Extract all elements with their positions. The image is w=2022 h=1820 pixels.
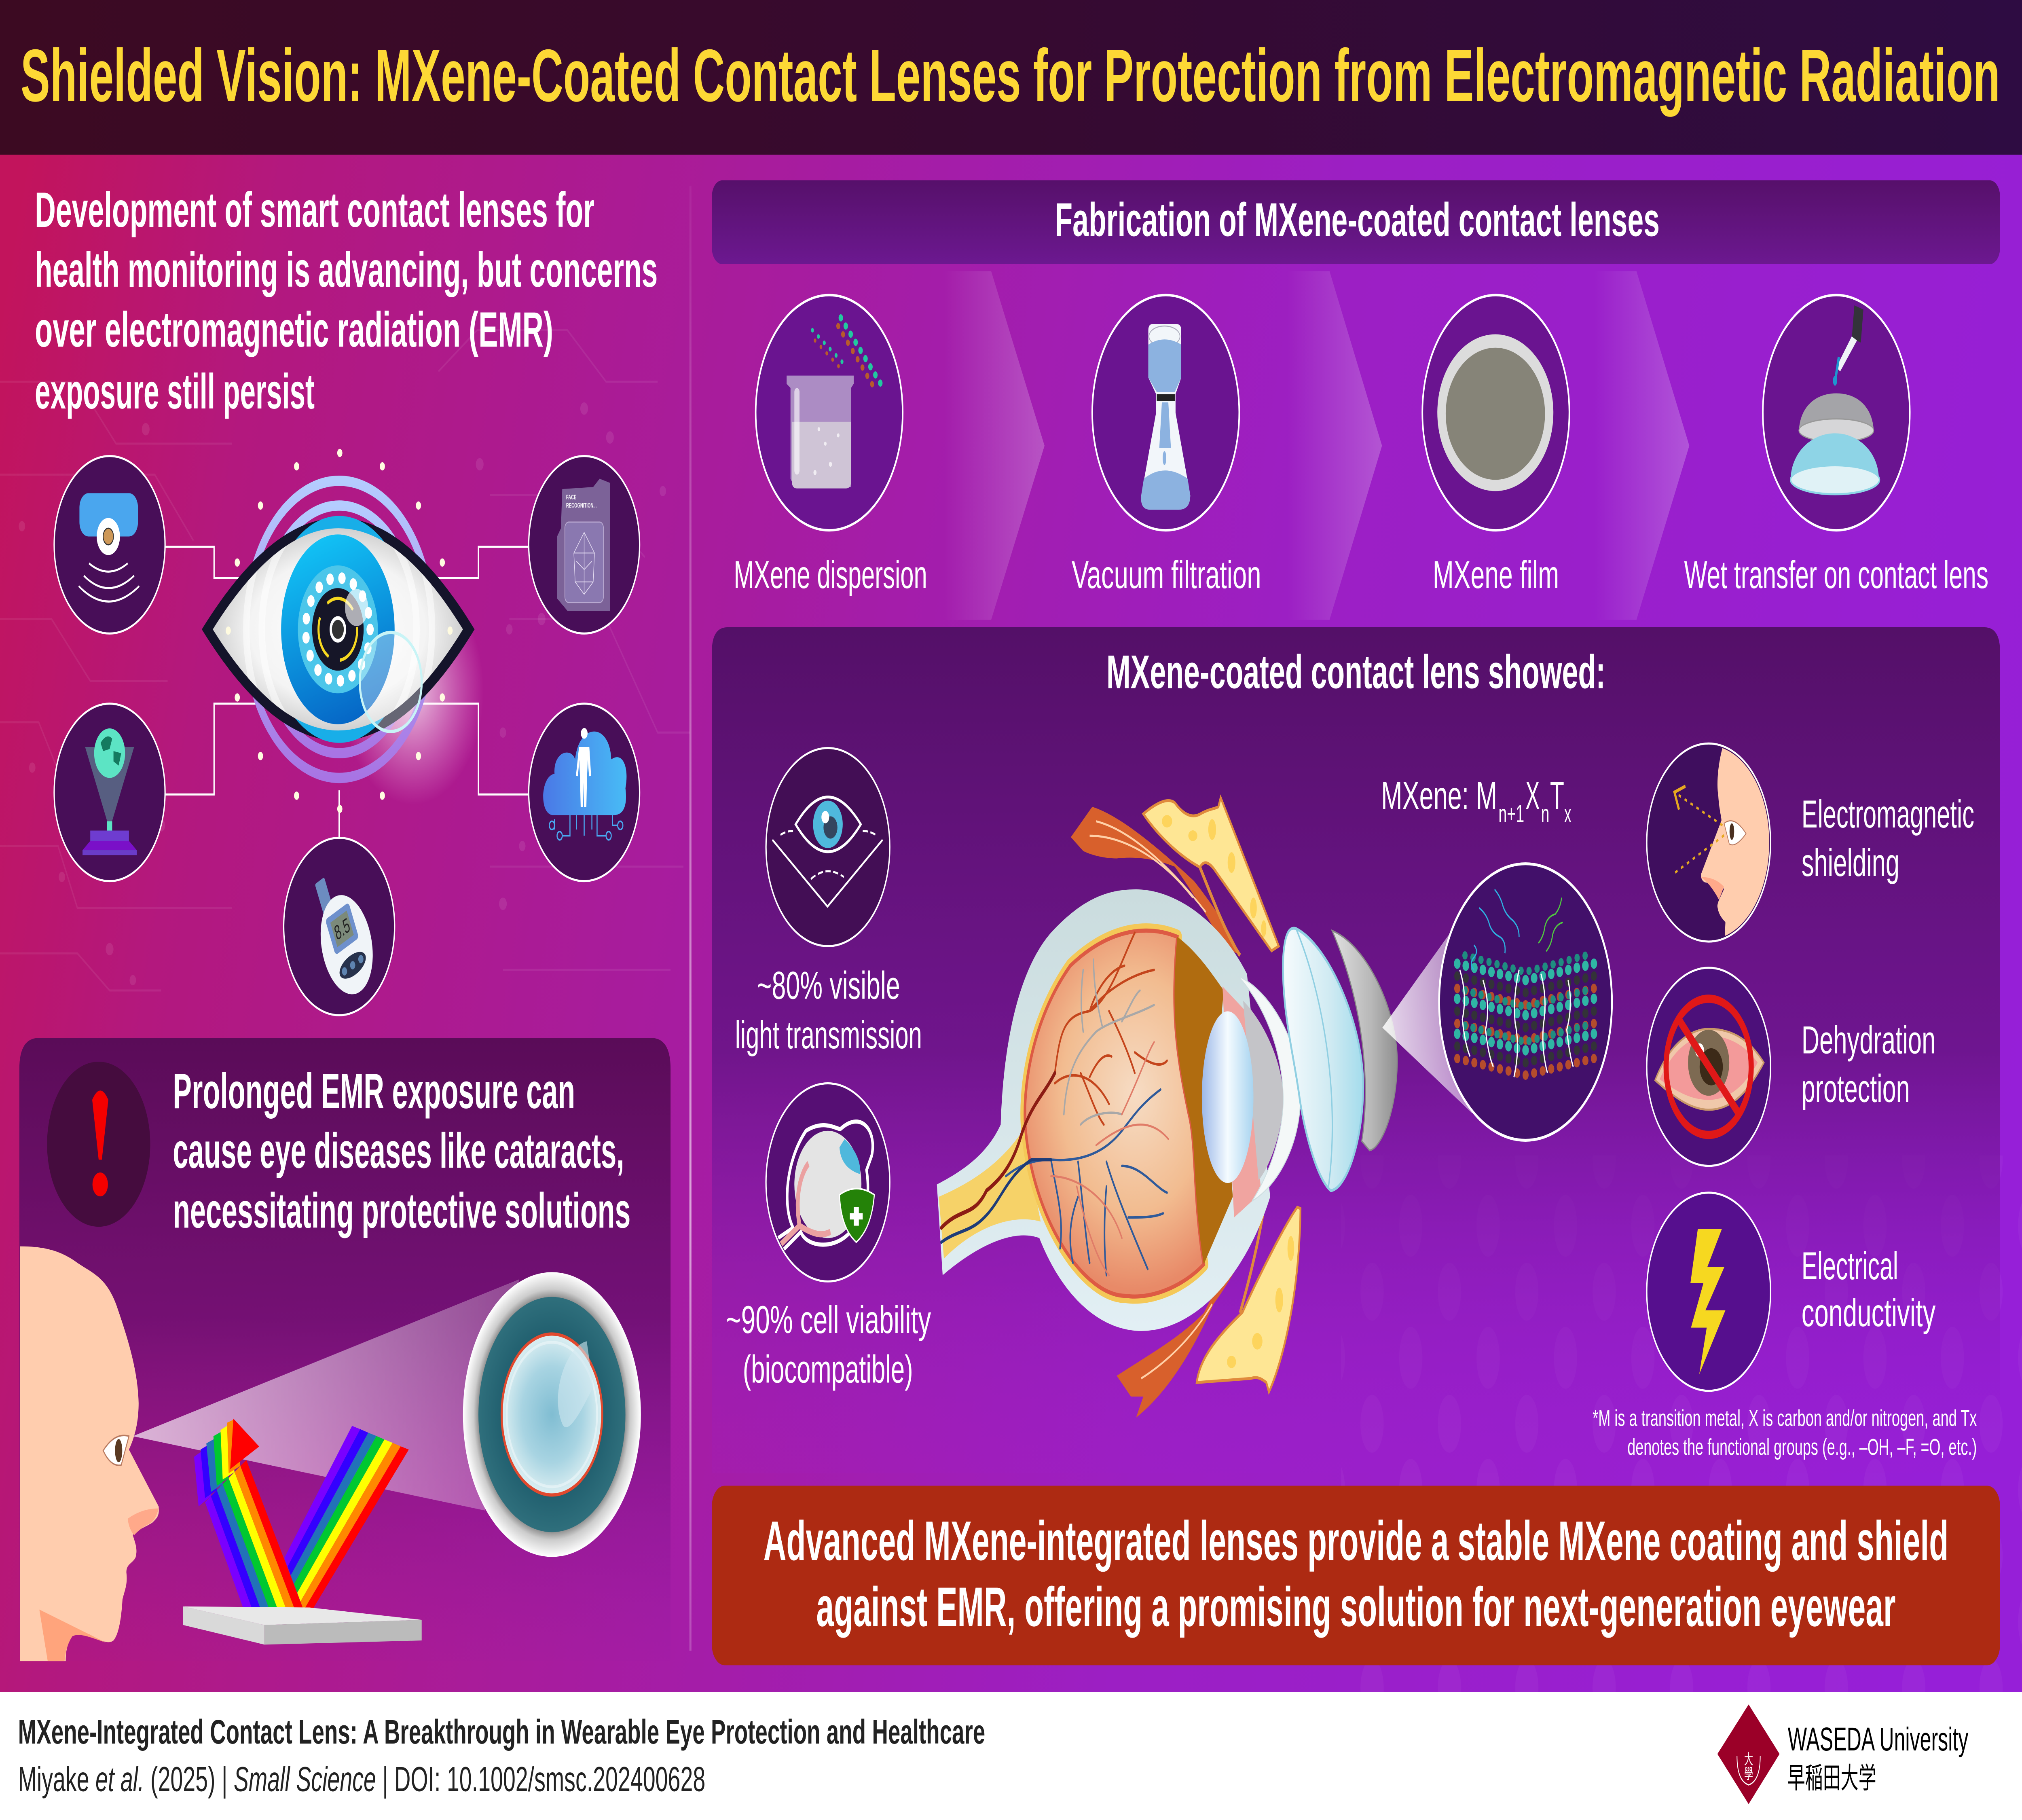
citation: Miyake et al. (2025) | Small Science | DOI: 10.1002/smsc.202400628 bbox=[18, 1760, 705, 1799]
label: electrical conductivity: Electrical bbox=[1802, 1244, 1898, 1288]
footer bbox=[0, 1692, 2022, 1820]
icon: electromagnetic shielding bbox=[1647, 743, 1780, 949]
logo: Waseda University: 大 bbox=[1744, 1752, 1753, 1768]
MXene formula: X bbox=[1525, 774, 1540, 818]
grey contact lens bbox=[1332, 931, 1397, 1150]
step 3: MXene film bbox=[1422, 295, 1569, 597]
footnote: *M is a transition metal, X is carbon and/or nitrogen, and Tx bbox=[1593, 1405, 1977, 1431]
label: electromagnetic shielding bbox=[1802, 793, 1974, 885]
icon: cloud with human bbox=[529, 704, 640, 881]
eye anatomy with lens bbox=[937, 798, 1397, 1418]
process arrows bbox=[944, 271, 1689, 620]
icon: face recognition display: RECOGNITION... bbox=[566, 502, 596, 509]
banner: conclusion: against EMR, offering a promising solution for next-generation eyewear bbox=[816, 1576, 1895, 1638]
icon: face recognition display bbox=[529, 456, 640, 633]
stat: cell viability: ~90% cell viability bbox=[726, 1298, 931, 1342]
footnote bbox=[1593, 1405, 1977, 1460]
sclera and optic nerve bbox=[937, 889, 1270, 1331]
step 2: vacuum filtration bbox=[1072, 295, 1261, 597]
MXene formula bbox=[1381, 774, 1571, 827]
central eye illustration bbox=[202, 449, 484, 813]
label: Vacuum filtration bbox=[1072, 553, 1261, 597]
warning text bbox=[173, 1063, 630, 1238]
coated contact lens bbox=[1283, 928, 1363, 1191]
upper lid bbox=[1143, 798, 1279, 955]
panel: results bbox=[712, 627, 2000, 1473]
icon: glucose meter: 8.5 bbox=[332, 913, 352, 945]
label: dehydration protection bbox=[1802, 1018, 1935, 1111]
label: electrical conductivity: conductivity bbox=[1802, 1291, 1936, 1335]
intro text: over electromagnetic radiation (EMR) bbox=[35, 302, 553, 358]
icon: biocompatible eye bbox=[766, 1084, 890, 1281]
logo: Waseda University: 早稲田大学 bbox=[1787, 1762, 1876, 1795]
label: electromagnetic shielding: shielding bbox=[1802, 841, 1899, 885]
eye lens bbox=[1202, 1012, 1253, 1183]
label: dehydration protection: protection bbox=[1802, 1067, 1910, 1111]
connector lines bbox=[165, 547, 529, 838]
panel: fabrication header bbox=[712, 180, 2000, 264]
rainbow reflection bbox=[183, 1419, 422, 1644]
footnote: denotes the functional groups (e.g., –OH, –F, =O, etc.) bbox=[1627, 1435, 1977, 1460]
large lens zoom bbox=[463, 1272, 641, 1557]
icon: face recognition display: FACE bbox=[566, 493, 576, 501]
logo: Waseda University: WASEDA University bbox=[1788, 1721, 1968, 1758]
lower lid bbox=[1197, 1207, 1301, 1392]
intro text: exposure still persist bbox=[35, 364, 315, 419]
beam of view bbox=[133, 1279, 519, 1511]
icon: warning bbox=[47, 1062, 150, 1227]
label: Wet transfer on contact lens bbox=[1684, 553, 1988, 597]
label: dehydration protection: Dehydration bbox=[1802, 1018, 1935, 1062]
MXene formula: n bbox=[1541, 800, 1549, 827]
logo: Waseda University: 學 bbox=[1744, 1766, 1753, 1782]
icon: electrical conductivity bbox=[1647, 1193, 1770, 1391]
cornea bbox=[1238, 976, 1301, 1201]
intro text bbox=[35, 182, 658, 419]
stat: cell viability bbox=[726, 1298, 931, 1391]
lower muscle bbox=[1117, 1211, 1264, 1418]
stat: visible light: ~80% visible bbox=[757, 964, 900, 1007]
intro text: health monitoring is advancing, but concerns bbox=[35, 242, 658, 298]
step 4: wet transfer bbox=[1684, 295, 1988, 597]
label: MXene film bbox=[1433, 553, 1559, 597]
warning text: necessitating protective solutions bbox=[173, 1183, 630, 1238]
banner: conclusion bbox=[712, 1486, 2000, 1665]
icon: glucose meter bbox=[284, 838, 395, 1015]
magnifier beam bbox=[1382, 923, 1472, 1113]
panel: fabrication header: Fabrication of MXene-coated contact lenses bbox=[1055, 193, 1660, 246]
panel heading: MXene-coated contact lens showed: bbox=[1106, 645, 1605, 698]
ciliary body bbox=[1174, 937, 1233, 1264]
MXene structure magnified bbox=[1439, 864, 1612, 1140]
retina and vitreous bbox=[1025, 931, 1204, 1297]
citation title: MXene-Integrated Contact Lens: A Breakthrough in Wearable Eye Protection and Healthcare bbox=[18, 1712, 985, 1751]
stat: visible light: light transmission bbox=[735, 1013, 922, 1057]
icon: smart lens sensor bbox=[54, 456, 165, 633]
intro text: Development of smart contact lenses for bbox=[35, 182, 594, 238]
MXene formula: x bbox=[1564, 800, 1571, 827]
retinal vessels bbox=[941, 933, 1168, 1275]
step 1: MXene dispersion bbox=[734, 295, 927, 597]
label: electromagnetic shielding: Electromagnetic bbox=[1802, 793, 1974, 836]
warning text: Prolonged EMR exposure can bbox=[173, 1063, 575, 1119]
label: MXene dispersion bbox=[734, 553, 927, 597]
MXene formula: T bbox=[1550, 774, 1564, 818]
warning text: cause eye diseases like cataracts, bbox=[173, 1123, 624, 1179]
head profile bbox=[20, 1246, 159, 1661]
label: electrical conductivity bbox=[1802, 1244, 1936, 1335]
icon: globe hologram bbox=[54, 704, 165, 881]
icon: light transmission bbox=[766, 748, 890, 946]
logo: Waseda University bbox=[1717, 1704, 1968, 1804]
icon: dehydration protection bbox=[1647, 968, 1770, 1166]
stat: cell viability: (biocompatible) bbox=[743, 1348, 913, 1391]
upper muscle bbox=[1071, 807, 1240, 955]
header bar bbox=[0, 0, 2022, 155]
MXene formula: n+1 bbox=[1498, 800, 1524, 827]
sparkles bbox=[226, 449, 453, 813]
panel: prolonged EMR exposure bbox=[19, 1038, 670, 1661]
stat: visible light bbox=[735, 964, 922, 1057]
MXene formula: MXene: M bbox=[1381, 774, 1497, 818]
